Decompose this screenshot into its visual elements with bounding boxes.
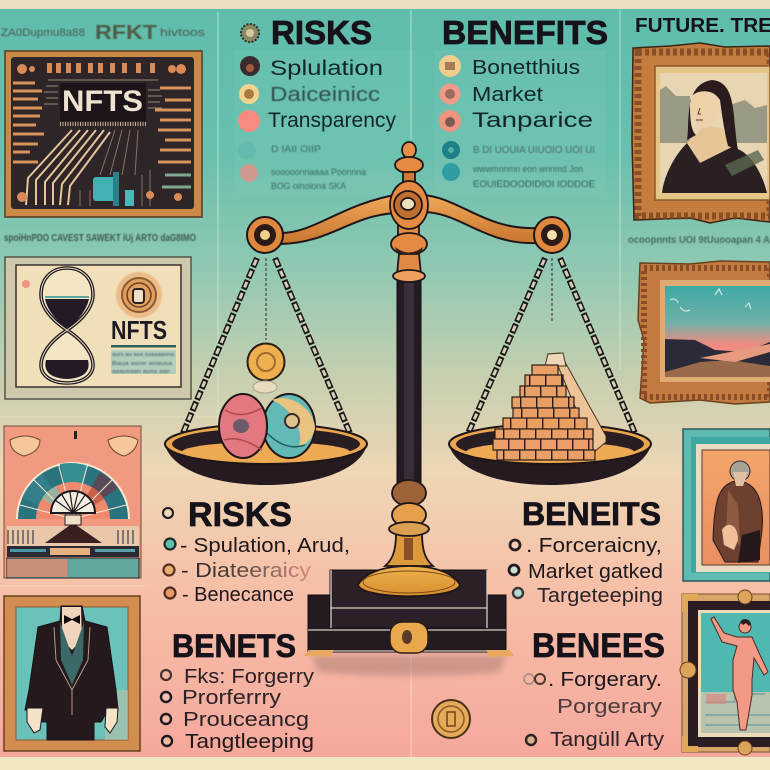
faded bullets: B DI UOUIA UIUOIO UOI UI: [473, 145, 595, 156]
top row of contact pads: [17, 63, 186, 74]
bullet: market: Market: [472, 84, 544, 106]
icon: gold coin: [432, 700, 470, 738]
left pan contents: coin and orbs: [219, 344, 315, 458]
bullet: transparency: Transparency: [268, 109, 396, 132]
bow tie: [64, 615, 80, 624]
panel: landscape painting: [638, 261, 770, 404]
waistcoat: [60, 622, 84, 685]
faded bullets: sooooonnaaaa Poonnna: [271, 167, 366, 177]
heading: BENEES: [532, 627, 665, 665]
heading: RISKS: [188, 496, 292, 534]
left chains: [178, 258, 355, 445]
lapels: [54, 627, 90, 715]
figure: [711, 617, 768, 730]
ornaments: [680, 662, 696, 678]
right pan contents: gold bricks: [493, 353, 606, 460]
right pan: [449, 424, 651, 485]
bullet: dateemic: [239, 84, 380, 106]
card lines: aurs au asa suaaaanna: [112, 352, 174, 358]
item: Porgerary: [557, 696, 662, 718]
face: [690, 91, 720, 128]
left traces: [13, 83, 44, 162]
heading: future trends: FUTURE. TRE: [635, 15, 770, 37]
chip: [60, 83, 146, 121]
icon: seal: [241, 24, 259, 42]
list: benees lower right: [524, 627, 665, 751]
card lines: [111, 345, 176, 375]
panel: risks top: [238, 14, 396, 191]
icon: coin seal: [116, 272, 162, 318]
bullet: bonetthius: Bonetthius: [472, 57, 580, 79]
item: Prouceancg: [183, 709, 309, 731]
list: benefits lower right: [509, 496, 663, 607]
left pan: [165, 424, 367, 485]
item: Targeteeping: [537, 585, 663, 607]
gold circuit traces: [26, 130, 110, 205]
list: risks lower left: [163, 496, 350, 606]
icon: hourglass: [41, 268, 93, 383]
bullet: tanparice: Tanparice: [472, 109, 593, 132]
clouds: [670, 289, 751, 311]
central balance scale: [165, 142, 651, 676]
top assembly: [390, 142, 428, 282]
item: . Forceraicny,: [526, 535, 662, 557]
card lines: Baua asne anausa: [112, 361, 172, 367]
list: benets lower left: [161, 628, 314, 753]
bullet: market: [440, 84, 544, 106]
faded bullets: [238, 141, 366, 191]
right traces: [155, 88, 191, 187]
item: - Benecance: [182, 584, 294, 606]
header: left panel title: hivtoos: [160, 27, 206, 39]
faded bullets: [442, 141, 595, 190]
faded bullets: D IAII OIIP: [271, 144, 321, 154]
item: - Spulation, Arud,: [180, 535, 350, 557]
bullet: bonetthius: [439, 55, 580, 79]
beam: [280, 195, 536, 244]
bullet: tanparice: [439, 109, 593, 132]
body: [662, 143, 767, 193]
teal components: [93, 177, 116, 201]
faded bullets: BOG oinoiona SKA: [271, 181, 346, 191]
chest: [687, 125, 732, 163]
panel: tuxedo portrait: [4, 596, 140, 751]
hair: [687, 80, 738, 150]
figure: [713, 481, 762, 562]
stand foot: [358, 480, 460, 596]
bullet: speculation: Splulation: [270, 57, 383, 80]
bullet ring: [163, 508, 173, 518]
item: - Diateeraicy: [181, 560, 311, 582]
base medallion: [390, 622, 428, 653]
header: left panel title: ZA0Dupmu8a88: [1, 27, 85, 39]
item: Tangtleeping: [185, 731, 314, 753]
heading: BENETS: [172, 628, 296, 664]
flowers: [10, 436, 40, 456]
right chains: [463, 258, 640, 445]
header: left panel title: RFKT: [95, 22, 157, 44]
column: [397, 280, 421, 492]
card lines: aaausaan ausa aan: [112, 369, 170, 375]
left ring: [247, 217, 283, 253]
chip label: NFTS: [62, 85, 143, 118]
panel: portrait of man in teal frame: [683, 429, 770, 581]
item: Tangüll Arty: [550, 729, 664, 751]
caption under NFT panel: spoiHnPDO CAVEST SAWEKT iUj ARTO daG8IMO: [4, 233, 196, 244]
panel: NFT circuit board: [5, 51, 202, 217]
hands: [27, 708, 43, 733]
bullet: speculation: [240, 56, 383, 80]
heading: BENEFITS: [442, 15, 608, 52]
lower bands: [7, 526, 139, 546]
right ring: [534, 217, 570, 253]
bullet: dateemic: Daiceinicc: [270, 84, 380, 106]
tuxedo jacket: [25, 606, 118, 740]
item: . Forgerary.: [548, 669, 662, 691]
item: Market gatked: [528, 561, 663, 583]
heading: BENEITS: [522, 496, 661, 532]
heading: RISKS: [271, 14, 372, 51]
header: left panel title: [1, 22, 206, 44]
fan: [16, 462, 130, 519]
faded bullets: wwwmnnmn eon wnnmd Jon: [472, 164, 583, 174]
panel: dancer in gilded frame: [680, 590, 770, 755]
faded bullets: EOUIEDOODIDIOI IODDOE: [473, 179, 595, 190]
NFTS label: NFTS: [111, 315, 167, 345]
shirt: [62, 607, 82, 650]
panel: Mona Lisa framed portrait: [632, 43, 770, 223]
panel: hourglass card: [5, 257, 191, 399]
item: Prorferrry: [182, 687, 281, 709]
panel: benefits top: [439, 15, 608, 190]
stand base: [303, 570, 514, 676]
item: Fks: Forgerry: [184, 666, 314, 688]
panel: fan artwork: [4, 426, 141, 578]
